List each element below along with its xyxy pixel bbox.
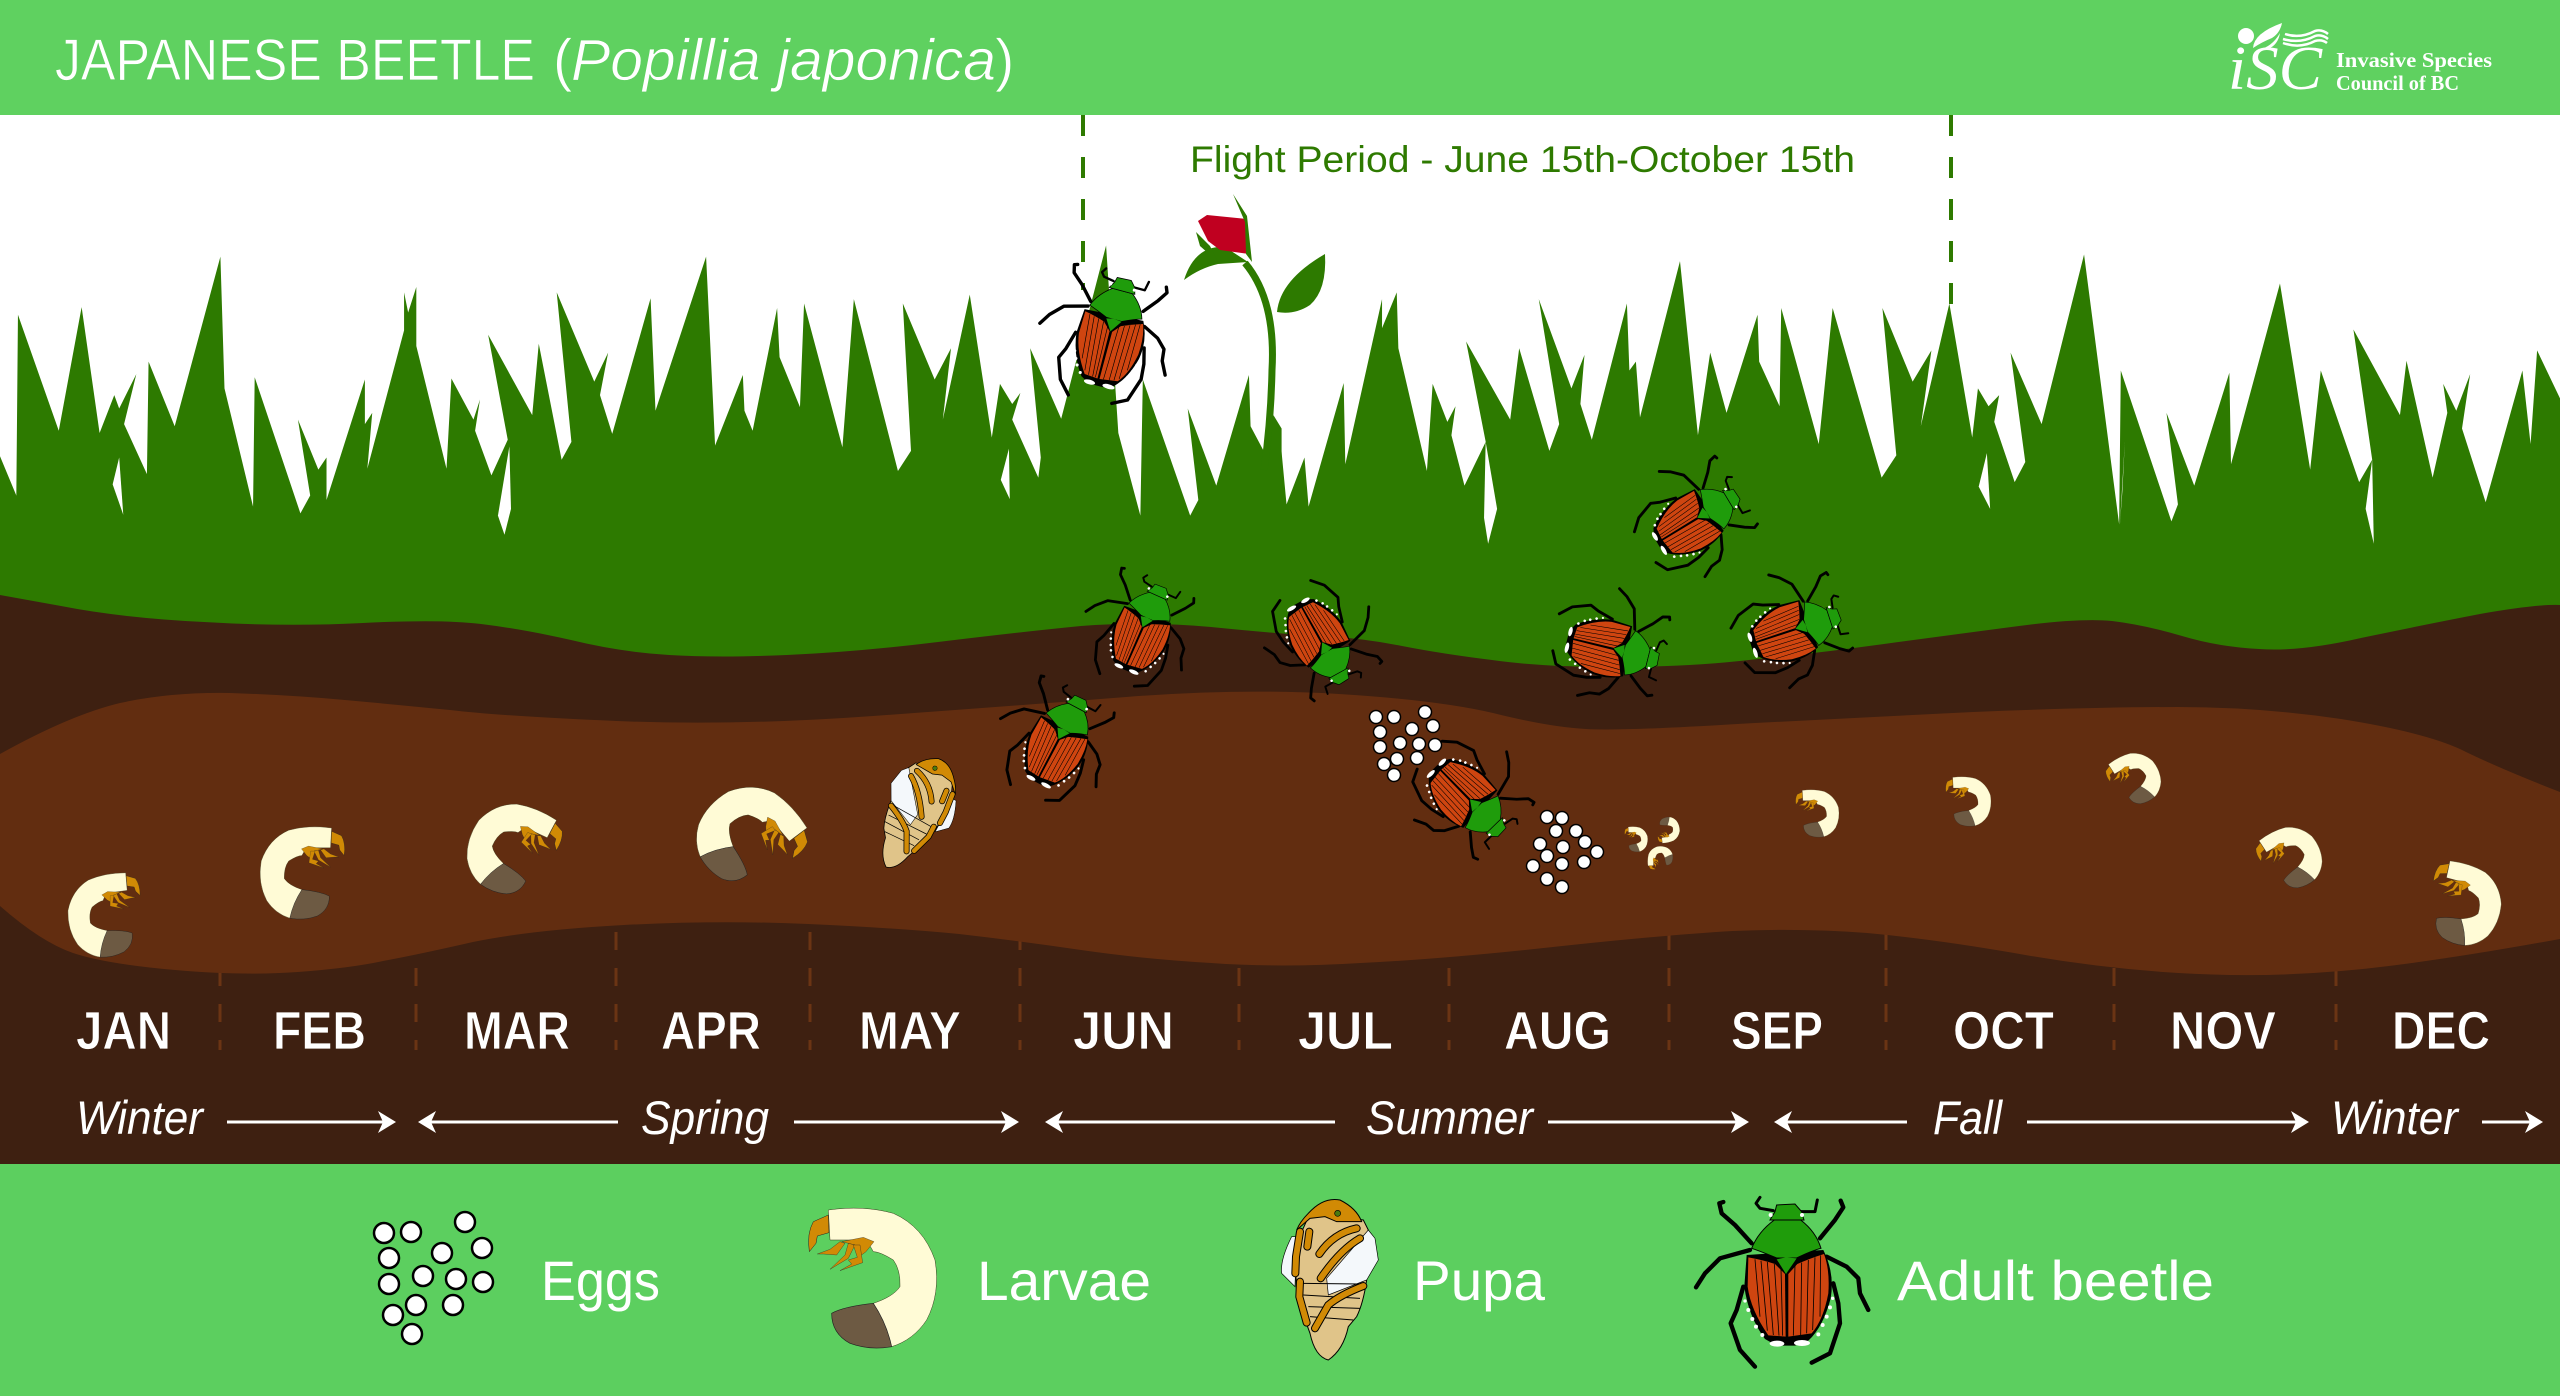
legend: eggs label: Eggs (541, 1249, 660, 1312)
season labels: Summer (1366, 1091, 1535, 1144)
soil: lighter layer (0, 692, 2560, 975)
title: ( (553, 28, 572, 93)
egg cluster 1 (1370, 706, 1442, 782)
season arrows (227, 1111, 2543, 1133)
legend: pupa label: Pupa (1413, 1249, 1546, 1312)
season labels: Fall (1933, 1091, 2003, 1144)
title: JAPANESE BEETLE (55, 28, 535, 93)
flight period text: Flight Period - June 15th-October 15th (1190, 139, 1855, 180)
season labels: Spring (641, 1091, 769, 1144)
newly hatched larvae (1625, 815, 1682, 869)
larva: March (453, 789, 569, 908)
month separators (220, 920, 2336, 1050)
adult beetle: laying eggs (1388, 714, 1548, 874)
adult beetle: flying (1024, 255, 1188, 418)
legend: adult beetle icon (1696, 1197, 1868, 1367)
season labels: Winter (76, 1091, 205, 1144)
month labels (76, 1001, 2490, 1061)
adult beetle: descending 1 (1247, 562, 1397, 711)
header band (0, 0, 2560, 115)
larva: January (63, 870, 148, 962)
larva: October (1946, 777, 1991, 826)
flight period start marker (1081, 115, 1085, 290)
logo: Invasive Species Council of BC: Invasive Species (2336, 48, 2492, 72)
month labels: APR (661, 1001, 761, 1061)
legend: eggs icon (374, 1212, 493, 1344)
month labels: AUG (1504, 1001, 1611, 1061)
larva: September (1796, 790, 1839, 837)
soil: dark layer (0, 595, 2560, 1164)
larva: December (2419, 857, 2510, 953)
pupa: May (854, 744, 977, 885)
flower on stem (1184, 194, 1325, 470)
season labels: Winter (2331, 1091, 2460, 1144)
legend: larvae label: Larvae (977, 1249, 1151, 1312)
logo: Invasive Species Council of BC: Council of BC (2336, 71, 2459, 95)
title (55, 28, 1014, 93)
month labels: JUN (1073, 1001, 1174, 1061)
season labels (76, 1091, 2460, 1144)
month labels: JAN (76, 1001, 171, 1061)
egg cluster 2 (1526, 810, 1604, 894)
larva: November 2 (2251, 816, 2332, 899)
adult beetle: emerging 2 (975, 665, 1132, 821)
grass (0, 246, 2560, 670)
legend: pupa icon (1281, 1199, 1378, 1360)
month labels: JUL (1298, 1001, 1393, 1061)
month labels: MAY (859, 1001, 961, 1061)
logo: Invasive Species Council of BC (2228, 23, 2492, 103)
adult beetle: emerging 1 (1065, 558, 1211, 703)
adult beetle: descending 2 (1541, 576, 1677, 713)
larva: February (260, 827, 345, 919)
larva: November 1 (2102, 744, 2169, 813)
title: Popillia japonica (571, 28, 996, 93)
legend: larvae icon (809, 1208, 937, 1348)
month labels: OCT (1953, 1001, 2054, 1061)
legend: adult beetle label: Adult beetle (1897, 1249, 2214, 1312)
larva: April (678, 766, 817, 904)
adult beetle: on grass (1614, 441, 1769, 596)
flight period end marker (1949, 115, 1953, 340)
month labels: NOV (2170, 1001, 2276, 1061)
month labels: DEC (2392, 1001, 2490, 1061)
title: ) (995, 28, 1014, 93)
logo: Invasive Species Council of BC: iSC (2228, 35, 2323, 103)
legend band (0, 1164, 2560, 1396)
adult beetle: on soil (1719, 557, 1860, 699)
month labels: MAR (464, 1001, 570, 1061)
month labels: FEB (273, 1001, 366, 1061)
month labels: SEP (1731, 1001, 1823, 1061)
